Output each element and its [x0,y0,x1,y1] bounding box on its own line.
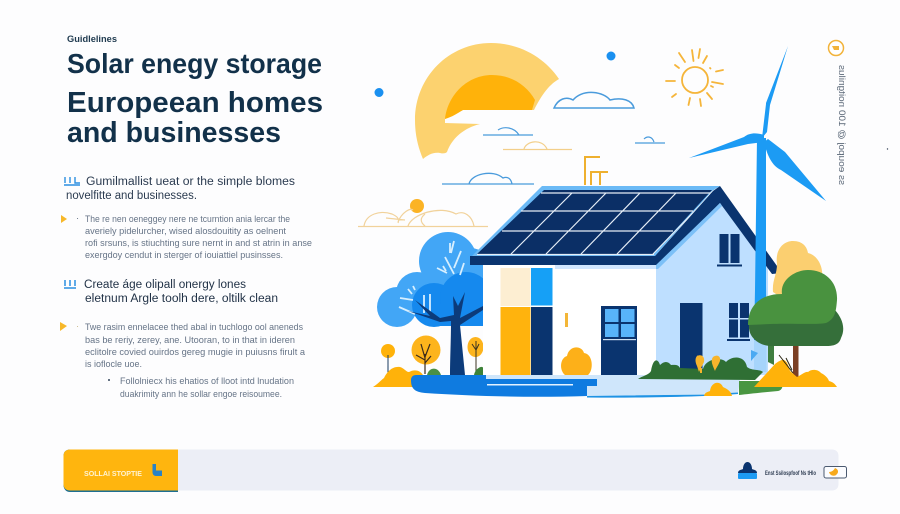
turbine blade up [762,46,788,138]
paragraph 2: bas be reriy, zerey, ane. Utooran, to in that in ideren [85,335,295,346]
subheading 1: novelfitte and businesses. [66,190,197,202]
wall light yellow [565,313,568,327]
hedge [638,358,763,380]
footer track [178,450,838,490]
title: and businesses [67,117,281,149]
twin trunk [768,345,774,365]
yellow bush on path [704,383,732,396]
title: Solar enegy storage [67,48,322,79]
illustration: sky [358,43,723,226]
sapling stem left [387,345,389,374]
yellow bush [373,367,423,387]
bullet note [108,376,294,400]
tree crown [377,232,492,327]
bullet note: Follolniecx his ehatios of lloot intd lnudation [120,376,294,387]
subheading 1 [66,176,295,202]
facade panel blue [531,268,552,306]
roof gable light edge [656,203,722,269]
cloud with yellow sun [358,199,488,226]
illustration: small bushes and saplings [373,336,484,387]
icon: yellow arrow 2 [60,322,67,331]
icon: blue quote mark 2 [64,280,76,288]
yellow back tree [773,241,822,310]
illustration: wind turbine [689,46,826,372]
paragraph 2: Twe rasim ennelacee thed abal in tuchlogo ool aneneds [85,322,303,333]
icon: blue corner [152,464,162,476]
right margin note [828,40,888,185]
cloud: small blue [483,128,533,135]
sapling branches right [472,341,479,373]
wall white [483,263,656,375]
eave trim blue [555,265,656,269]
dot: blue left [374,88,384,97]
wall blue gable [656,203,768,375]
yellow shrub [561,347,592,375]
tree crown shadow [412,272,483,327]
footer battery icon [738,462,757,479]
title [67,48,323,149]
platform stripe [487,384,573,386]
tree crown dark [749,310,843,346]
tree trunk and branches [408,292,483,375]
paragraph 2: is ioflocle uoe. [85,359,142,370]
paragraph 1: exergdoy cendut in sterger of iouiattiel pusinsses. [85,250,283,261]
bullet note: duakrimity ann he sollar engoe reisoumee. [120,389,282,400]
paragraph 1: · [76,213,79,224]
illustration: foreground [411,241,843,398]
tab label: SOLLAI STOPTIE [84,469,142,478]
sun: large crescent [415,43,559,159]
solar panel array [472,186,720,256]
front door [680,303,702,369]
facade panel yellow [500,307,530,375]
paragraph 2 [76,321,306,370]
upper window [717,234,742,266]
footer tab [64,450,178,492]
paragraph 1: The re nen oeneggey nere ne tcurntion ania lercar the [85,214,290,225]
sapling circle middle [412,336,440,364]
turbine tower lower [754,340,766,372]
platform blue lower line [587,392,738,398]
sun outline icon [666,49,723,106]
dot: blue right [606,52,616,60]
mound branches [779,355,793,373]
speck [887,148,888,150]
tree leaves [399,241,464,314]
sapling stem [387,355,389,366]
title: Europeean homes [67,87,323,119]
paragraph 1 [76,213,312,261]
garage door [601,306,637,375]
turbine blade right [764,139,826,201]
vertical text: ss eoupoj @ 100 noitgnilus [836,65,847,185]
roof gable navy with eave [470,186,782,274]
turbine tower [754,138,766,340]
subheading 2 [84,279,278,305]
lower window [727,303,750,341]
icon: yellow circle [828,40,844,56]
tree crown light [748,270,837,325]
illustration: house [470,186,782,375]
cloud: blue right edge [635,137,665,143]
cloud: small yellow [503,142,572,150]
footer caption: Enst Ssilospfoof Ns tHlo [765,470,816,477]
panel grid [477,193,712,254]
footer bar [64,450,846,492]
solar panels [477,190,712,254]
sapling branches middle [416,344,431,374]
sapling circle right [468,337,484,357]
yellow mound [754,360,837,387]
path light blue [486,375,740,397]
green lawn [739,381,782,395]
panel: text column [60,34,323,400]
green bush left [427,369,441,375]
turbine base reflection [751,350,758,361]
turbine blade left [689,133,764,158]
eyebrow label: Guidlelines [67,34,117,45]
tree trunk right [793,345,798,377]
sun: inner disc [445,75,535,119]
sapling circle left [381,344,395,358]
subheading 1: Gumilmallist ueat or the simple blomes [86,176,295,188]
icon: yellow arrow 1 [61,215,67,223]
paragraph 2: eclitolre covied ouirdos gereg mugie in puiusns firult a [85,347,306,358]
cloud: blue lower [442,173,534,184]
yellow flowers [696,355,720,373]
facade panel cream [500,268,530,306]
subheading 2: eletnum Argle toolh dere, oltilk clean [85,293,278,305]
roof light frame [472,186,720,256]
paragraph 1: averiely pidelurcher, wised alosdouitity as oelnent [85,226,286,237]
cloud: large blue [554,92,634,108]
subheading 2: Create áge olipall onergy lones [84,279,246,291]
paragraph 1: rofi srsuns, is stiuchting sure nernt in and st atrin in anse [85,238,312,249]
icon: blue quote mark 1 [64,177,80,185]
platform blue [411,375,597,397]
illustration: left tree [377,232,492,375]
chimney pipes [585,157,608,185]
green bush right [474,367,483,375]
footer badge [824,466,846,478]
facade panel navy [531,307,552,375]
paragraph 2: · [76,321,79,332]
